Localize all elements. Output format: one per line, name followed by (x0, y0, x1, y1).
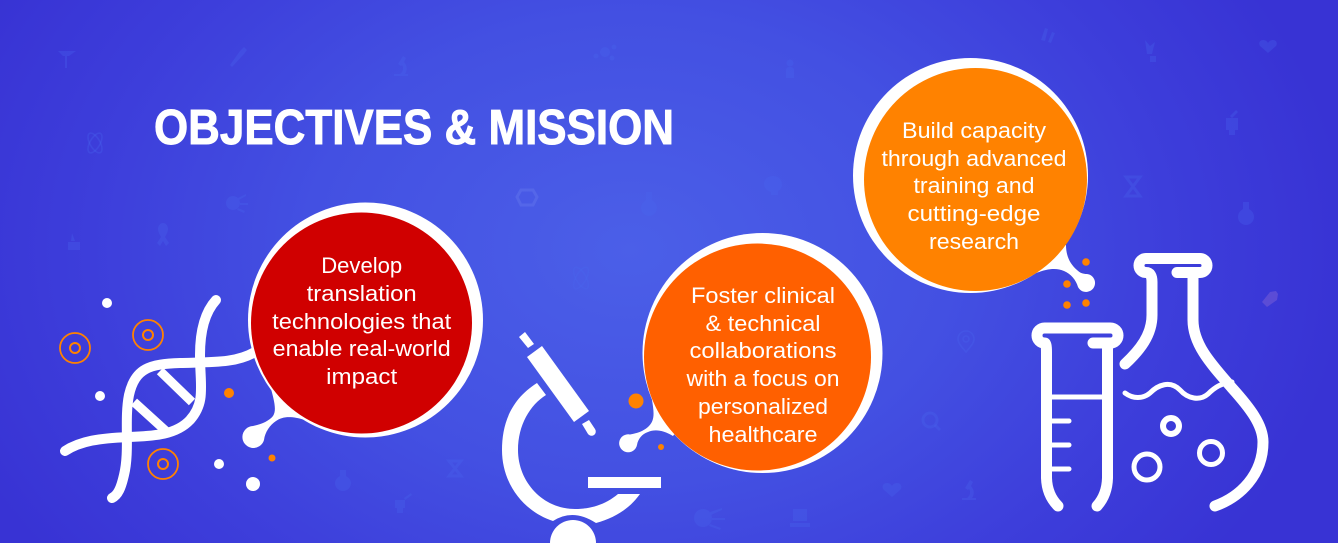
text: build capacity: Build capacity (902, 118, 1047, 143)
text: develop translation technologies: translation (307, 281, 417, 306)
panel: orange bubble (853, 58, 1095, 293)
panel: dark orange bubble (619, 233, 882, 473)
icon: microscope (502, 332, 661, 543)
text: build capacity (882, 118, 1066, 254)
text: foster clinical collaborations: with a focus on (685, 366, 840, 391)
text: develop translation technologies (272, 253, 452, 389)
text: develop translation technologies: impact (326, 364, 398, 389)
text: foster clinical collaborations: Foster clinical (691, 283, 835, 308)
text: foster clinical collaborations: collaborations (690, 338, 836, 363)
title: OBJECTIVES & MISSION (154, 101, 674, 155)
panel: red bubble (242, 202, 483, 448)
text: develop translation technologies: enable real-world (273, 336, 451, 361)
text: foster clinical collaborations: personalized (698, 394, 828, 419)
text: foster clinical collaborations (685, 283, 840, 447)
text: build capacity: cutting-edge (908, 201, 1040, 226)
icon: DNA helix with dots (60, 298, 276, 498)
icon: flask (1125, 258, 1263, 506)
icon: orange droplets (1063, 258, 1090, 309)
text: develop translation technologies: Develop (321, 253, 402, 278)
text: develop translation technologies: technologies that (272, 309, 452, 334)
text: foster clinical collaborations: & technical (706, 311, 820, 336)
icon: test tube (1037, 328, 1118, 506)
text: build capacity: through advanced (882, 146, 1066, 171)
text: build capacity: research (929, 229, 1019, 254)
text: foster clinical collaborations: healthcare (708, 422, 818, 447)
text: build capacity: training and (914, 173, 1034, 198)
